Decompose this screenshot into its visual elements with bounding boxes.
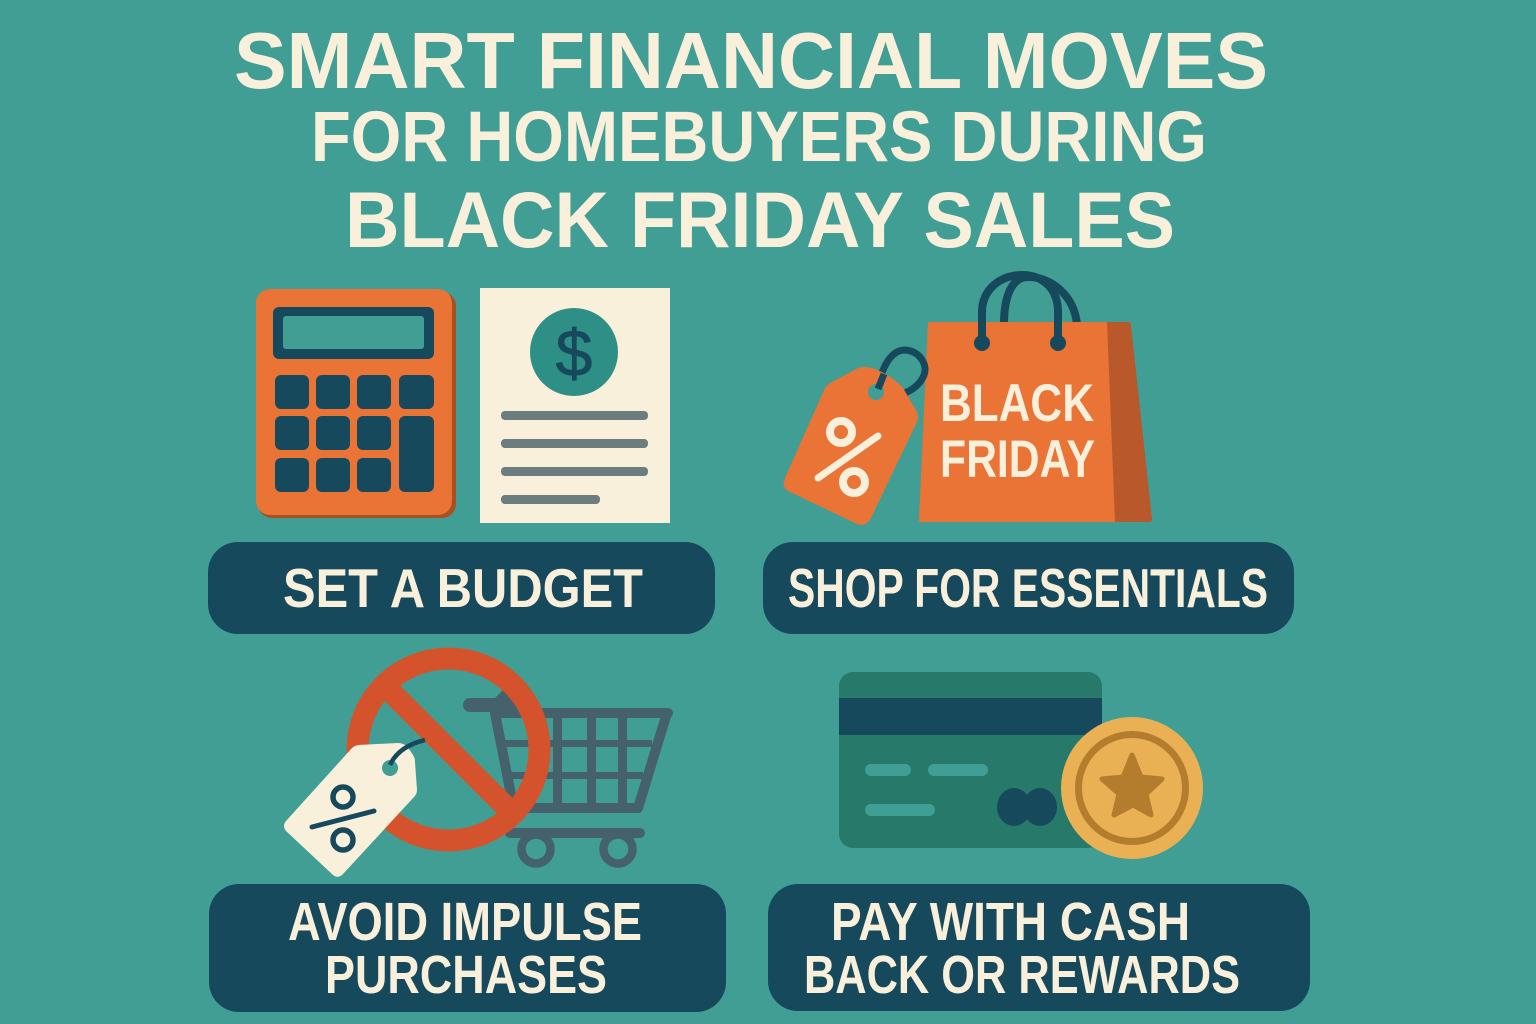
icon: credit card	[839, 672, 1102, 848]
icon: cream price tag	[284, 740, 425, 877]
label: set a budget: SET A BUDGET	[283, 557, 643, 619]
icon: budget document	[480, 288, 670, 523]
icon: budget document: $	[556, 316, 592, 390]
icon: calculator	[256, 289, 456, 518]
icon: orange price tag	[784, 350, 925, 525]
label: avoid impulse purchases	[209, 884, 726, 1012]
title	[234, 16, 1268, 264]
label: shop for essentials: SHOP FOR ESSENTIALS	[788, 557, 1268, 619]
label: set a budget	[208, 542, 715, 634]
label: avoid impulse purchases: PURCHASES	[325, 945, 607, 1005]
label: pay with cash back or rewards: BACK OR REWARDS	[804, 945, 1240, 1005]
label: avoid impulse purchases: AVOID IMPULSE	[288, 892, 642, 952]
icon: prohibition sign	[358, 658, 540, 840]
label: pay with cash back or rewards: PAY WITH CASH	[831, 892, 1190, 952]
label: shop for essentials	[763, 542, 1294, 634]
icon: shopping bag: FRIDAY	[940, 430, 1095, 489]
title: FOR HOMEBUYERS DURING	[311, 98, 1207, 177]
icon: shopping bag: BLACK	[940, 374, 1094, 433]
title: BLACK FRIDAY SALES	[345, 175, 1175, 264]
title: SMART FINANCIAL MOVES	[234, 16, 1268, 105]
icon: shopping bag	[919, 275, 1152, 522]
icon: reward coin	[1061, 717, 1203, 859]
icon: shopping cart	[470, 688, 668, 864]
label: pay with cash back or rewards	[768, 884, 1310, 1011]
